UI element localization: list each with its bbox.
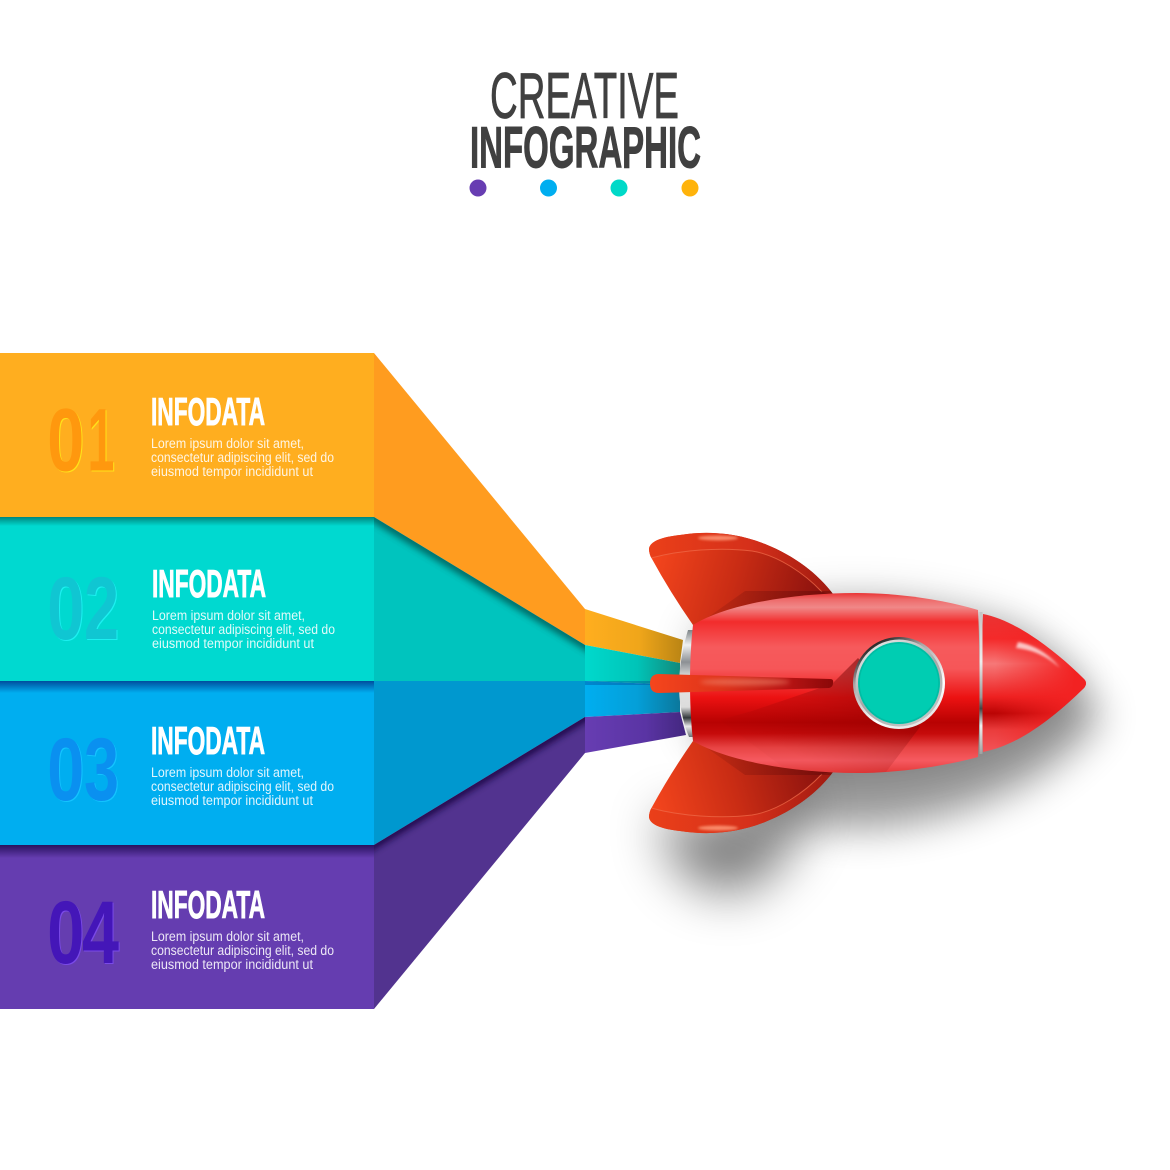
- panel: band 03: [0, 681, 680, 845]
- text block 01: consectetur adipiscing elit, sed do: [151, 450, 334, 465]
- text block 02: INFODATA: [152, 563, 266, 606]
- number 03: 0: [47, 719, 84, 819]
- side facet 03: [374, 681, 585, 845]
- text block 02: consectetur adipiscing elit, sed do: [152, 622, 335, 637]
- text block 03: eiusmod tempor incididunt ut: [151, 793, 313, 808]
- number 02: 2: [84, 558, 119, 658]
- text block 02: eiusmod tempor incididunt ut: [152, 636, 314, 651]
- front 01: [0, 353, 374, 517]
- center fin highlight: [700, 678, 790, 686]
- panel: band 01: [0, 353, 683, 663]
- text block 04: Lorem ipsum dolor sit amet,: [151, 929, 304, 944]
- text block 01: [151, 391, 334, 479]
- metal separator: [980, 612, 982, 754]
- number 04: [47, 882, 120, 983]
- side facet 04: [374, 717, 585, 1009]
- nose highlight: [1016, 642, 1060, 668]
- tail 04: [585, 712, 686, 753]
- number 03: 3: [84, 719, 119, 819]
- panel: band 04: [0, 712, 686, 1009]
- number 02: [47, 558, 120, 659]
- text block 02: Lorem ipsum dolor sit amet,: [152, 608, 305, 623]
- text block 04: [151, 884, 334, 972]
- colour dots: [470, 180, 698, 196]
- tail 03: [585, 681, 680, 717]
- tail 01: [585, 609, 683, 663]
- text block 03: Lorem ipsum dolor sit amet,: [151, 765, 304, 780]
- text block 03: consectetur adipiscing elit, sed do: [151, 779, 334, 794]
- number 02: 0: [47, 558, 84, 658]
- number 03: [47, 719, 120, 820]
- number 04: 0: [47, 882, 84, 982]
- number 01: 0: [48, 390, 85, 490]
- number 01: 1: [88, 390, 116, 490]
- rocket nose cone: [982, 614, 1086, 752]
- rocket lower fin: [649, 741, 833, 834]
- number 04: 0: [48, 883, 85, 983]
- front 03: [0, 681, 374, 845]
- rocket upper fin: [649, 532, 832, 625]
- text block 01: eiusmod tempor incididunt ut: [151, 464, 313, 479]
- tail 02: [585, 645, 680, 685]
- side facet 01: [374, 353, 585, 645]
- panel: band 02: [0, 517, 680, 685]
- side facet 02: [374, 517, 585, 681]
- number 03: 0: [48, 720, 85, 820]
- heading: creative: CREATIVE: [490, 60, 679, 132]
- number 02: 2: [85, 559, 120, 659]
- front 02: [0, 517, 374, 681]
- text block 01: Lorem ipsum dolor sit amet,: [151, 436, 304, 451]
- rocket drop shadow: [660, 593, 1102, 892]
- number 04: 4: [82, 882, 119, 982]
- porthole window: [853, 637, 945, 729]
- number 02: 0: [48, 559, 85, 659]
- title: [470, 60, 701, 180]
- center fin: [650, 674, 833, 693]
- number 04: 4: [83, 883, 120, 983]
- rocket body: [690, 593, 980, 773]
- rocket: [645, 528, 1086, 838]
- text block 02: [152, 563, 335, 651]
- text block 01: INFODATA: [151, 391, 265, 434]
- text block 04: consectetur adipiscing elit, sed do: [151, 943, 334, 958]
- text block 03: [151, 720, 334, 808]
- text block 04: eiusmod tempor incididunt ut: [151, 957, 313, 972]
- number 01: 0: [47, 390, 84, 490]
- text block 04: INFODATA: [151, 884, 265, 927]
- text block 03: INFODATA: [151, 720, 265, 763]
- window cast shadow: [745, 658, 920, 773]
- heading: infographic: INFOGRAPHIC: [470, 116, 701, 180]
- front 04: [0, 845, 374, 1009]
- number 01: 1: [88, 390, 114, 490]
- rocket exhaust nozzle: [679, 630, 694, 737]
- number 03: 3: [85, 720, 120, 820]
